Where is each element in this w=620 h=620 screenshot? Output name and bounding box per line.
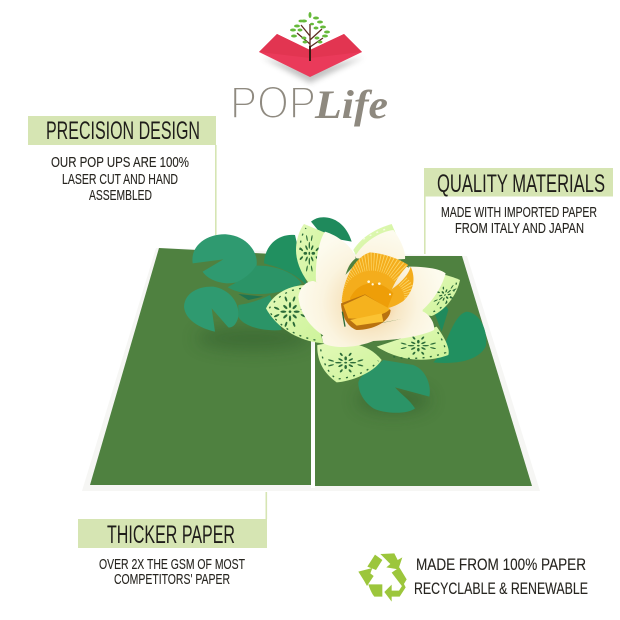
description: OUR POP UPS ARE 100% [51,154,189,171]
panel: recyclable note [358,553,588,602]
heading bar [424,168,613,196]
heading: PRECISION DESIGN [46,117,200,145]
description [441,204,597,237]
lily pads [184,217,486,413]
panel: thicker paper [78,519,267,588]
icon: red open book [259,34,364,83]
logo word: POP: POP [230,77,316,128]
panel: precision design [28,116,216,204]
description: OVER 2X THE GSM OF MOST [99,556,245,573]
panel: quality materials [424,168,613,237]
icon: tree [290,12,330,61]
logo word: Life: Life [314,82,388,127]
card base [82,248,540,491]
dotted petal edges [269,228,457,379]
recycling text [414,555,588,598]
flower and lily pads, drawn in 3x zoom coordinates [184,217,486,413]
icon: recycling arrows [358,553,407,602]
petals, centre and stamens (finer 3x crop coordinates) [298,230,446,347]
heading bar [28,116,216,145]
panel connector lines [215,145,426,519]
lace cut-outs [269,228,460,379]
description [51,154,189,204]
orange stamen fans [342,252,414,308]
cream petals [298,230,446,347]
logo: Pop Life [230,12,388,128]
description: COMPETITORS' PAPER [114,571,230,588]
description: LASER CUT AND HAND [62,171,178,188]
heading: THICKER PAPER [107,521,235,549]
flower core [341,280,391,330]
lime lace petals [266,224,460,382]
pop-up card illustration [82,217,540,491]
description [99,556,245,588]
description: ASSEMBLED [89,187,152,204]
heading bar [78,519,267,548]
cast shadows [197,327,430,413]
